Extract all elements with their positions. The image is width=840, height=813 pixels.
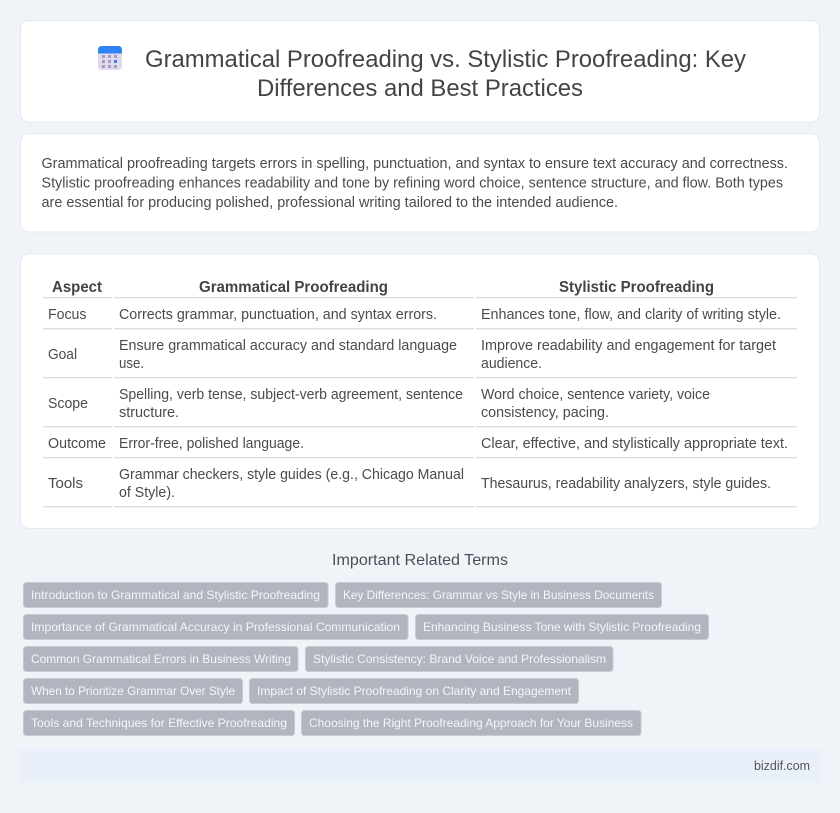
intro text: Grammatical proofreading targets errors in spelling, punctuation, and syntax to ensure text accuracy and correctness. [42,156,788,172]
panel: header [20,20,820,122]
tag [24,614,408,640]
table header row: Stylistic Proofreading [559,279,714,296]
tag: Choosing the Right Proofreading Approach for Your Business [309,716,633,730]
row: goal: Goal [48,347,77,363]
tag [24,678,242,704]
row: focus [48,307,781,323]
row: scope: consistency, pacing. [481,405,609,421]
row: focus: Focus [48,307,86,323]
panel: comparison table [20,254,820,528]
tag: Key Differences: Grammar vs Style in Business Documents [343,588,654,602]
row: tools: Grammar checkers, style guides (e.g., Chicago Manual [119,467,464,483]
tag [250,678,578,704]
icon: calendar [98,46,122,70]
table header row [52,279,714,296]
row: scope: structure. [119,405,179,421]
title [145,46,746,102]
table header row: Grammatical Proofreading [199,279,388,296]
tag: Enhancing Business Tone with Stylistic Proofreading [423,620,701,634]
intro text: Stylistic proofreading enhances readability and tone by refining word choice, sentence structure, and flow. Both types [42,176,783,192]
table header row: Aspect [52,279,103,296]
title: Grammatical Proofreading vs. Stylistic Proofreading: Key [145,46,746,73]
tag [336,582,662,608]
tag: Common Grammatical Errors in Business Writing [31,652,291,666]
row: goal: use. [119,356,144,372]
tag [302,710,641,736]
related term tags [24,582,708,736]
tag: Stylistic Consistency: Brand Voice and Professionalism [313,652,606,666]
heading: related terms: Important Related Terms [332,552,508,569]
row: tools: Thesaurus, readability analyzers, style guides. [481,476,771,492]
row: scope: Spelling, verb tense, subject-verb agreement, sentence [119,387,463,403]
tag [24,710,294,736]
tag [24,646,298,672]
row: goal: Ensure grammatical accuracy and standard language [119,338,457,354]
row: tools: Tools [48,476,83,492]
tag: Tools and Techniques for Effective Proofreading [31,716,287,730]
tag [24,582,328,608]
tag: Importance of Grammatical Accuracy in Professional Communication [31,620,400,634]
row: scope: Scope [48,396,88,412]
row: outcome [48,436,788,452]
row: outcome: Error-free, polished language. [119,436,304,452]
intro text [42,156,788,211]
row: scope: Word choice, sentence variety, voice [481,387,710,403]
row: outcome: Clear, effective, and stylistically appropriate text. [481,436,788,452]
intro text: are essential for producing polished, professional writing tailored to the intended audience. [42,195,618,211]
tag [306,646,613,672]
row: tools [48,467,771,501]
tag: Impact of Stylistic Proofreading on Clarity and Engagement [257,684,572,698]
row: scope [48,387,710,421]
footer [20,749,820,782]
row: focus: Enhances tone, flow, and clarity of writing style. [481,307,781,323]
footer source: bizdif.com [754,758,810,773]
row: focus: Corrects grammar, punctuation, and syntax errors. [119,307,437,323]
row: goal [48,338,776,372]
tag: When to Prioritize Grammar Over Style [31,684,235,698]
row: goal: audience. [481,356,542,372]
row: outcome: Outcome [48,436,106,452]
tag: Introduction to Grammatical and Stylistic Proofreading [31,588,320,602]
panel: introduction [20,134,820,232]
row: goal: Improve readability and engagement for target [481,338,776,354]
title: Differences and Best Practices [257,75,583,102]
row: tools: of Style). [119,485,175,501]
tag [416,614,708,640]
